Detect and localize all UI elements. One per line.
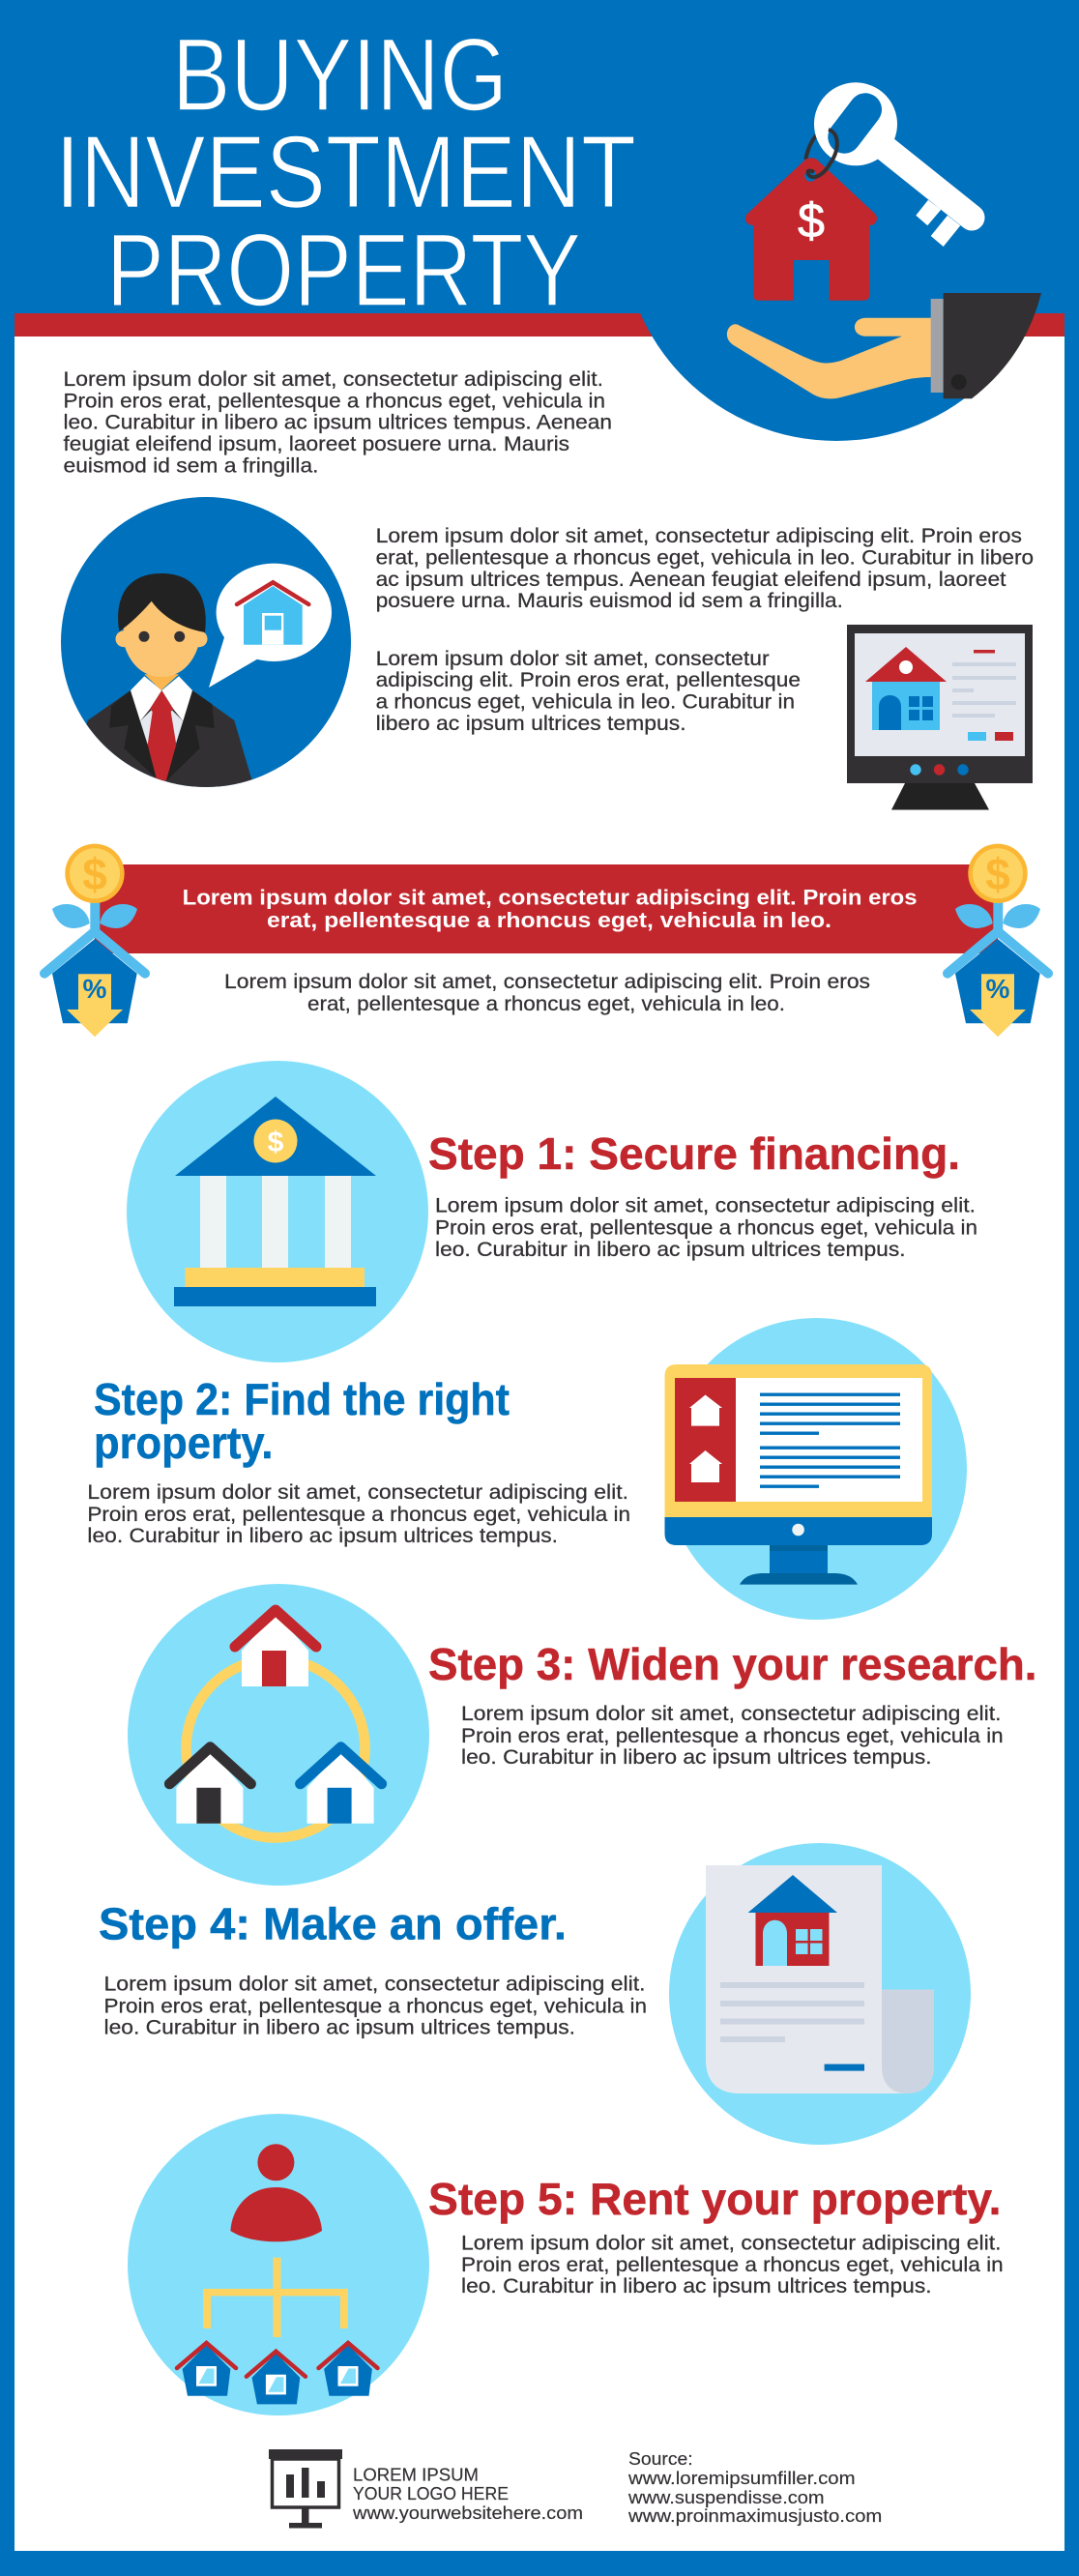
icon: logo presentation board — [269, 2449, 342, 2528]
icon: right money plant house — [948, 844, 1048, 1037]
text block: sources: Source: — [628, 2449, 693, 2469]
icon: step 1 bank: $ — [268, 1127, 284, 1158]
text block: step 3: Lorem ipsum dolor sit amet, consectetur adipiscing elit. — [461, 1703, 1002, 1725]
title: BUYING — [172, 16, 508, 132]
icon: step 5 landlord and tenants — [128, 2114, 429, 2415]
text block: step 1 — [435, 1195, 977, 1261]
text block: step 5: Lorem ipsum dolor sit amet, consectetur adipiscing elit. — [461, 2233, 1002, 2255]
text block: logo — [352, 2466, 583, 2523]
text block: left of monitor: Lorem ipsum dolor sit amet, consectetur — [376, 648, 770, 670]
text block: intro: leo. Curabitur in libero ac ipsum ultrices tempus. Aenean — [64, 412, 612, 434]
icon: hand receiving key and house tag: $ — [798, 193, 825, 248]
text block: right of businessman — [376, 525, 1034, 612]
text block: step 5 — [461, 2233, 1004, 2298]
text block: step 3: Proin eros erat, pellentesque a rhoncus eget, vehicula in — [461, 1725, 1004, 1747]
icon: step 2 computer listing — [665, 1318, 967, 1620]
title — [55, 16, 636, 328]
banner: red callout: Lorem ipsum dolor sit amet, consectetur adipiscing elit. Proin eros — [183, 886, 918, 909]
text block: under banner: Lorem ipsum dolor sit amet, consectetur adipiscing elit. Proin eros — [224, 971, 870, 993]
banner: red callout: erat, pellentesque a rhoncus eget, vehicula in leo. — [267, 908, 831, 932]
text block: right of businessman: Lorem ipsum dolor sit amet, consectetur adipiscing elit. Proin eros — [376, 525, 1022, 547]
text block: step 4 — [104, 1973, 647, 2038]
icon: monitor with house listing — [847, 625, 1033, 810]
text block: step 4: Proin eros erat, pellentesque a rhoncus eget, vehicula in — [104, 1996, 647, 2018]
text block: step 1: leo. Curabitur in libero ac ipsum ultrices tempus. — [435, 1239, 906, 1261]
text block: step 5: leo. Curabitur in libero ac ipsum ultrices tempus. — [461, 2275, 932, 2298]
text block: intro: Proin eros erat, pellentesque a rhoncus eget, vehicula in — [64, 391, 605, 413]
icon: hand receiving key and house tag — [622, 12, 1051, 441]
text block: right of businessman: erat, pellentesque a rhoncus eget, vehicula in leo. Curabitur in libero — [376, 546, 1034, 569]
icon: businessman with speech bubble — [61, 497, 351, 793]
text block: under banner: erat, pellentesque a rhoncus eget, vehicula in leo. — [307, 993, 785, 1015]
icon: left money plant house — [44, 844, 145, 1037]
icon: step 3 houses on a ring — [128, 1584, 429, 1886]
text block: left of monitor: a rhoncus eget, vehicula in leo. Curabitur in — [376, 691, 795, 714]
text block: sources: www.suspendisse.com — [627, 2488, 825, 2507]
text block: step 2: Proin eros erat, pellentesque a rhoncus eget, vehicula in — [87, 1504, 630, 1526]
icon: step 4 offer document — [669, 1843, 971, 2145]
heading: step 5: Step 5: Rent your property. — [428, 2174, 1002, 2224]
text block: step 1: Lorem ipsum dolor sit amet, consectetur adipiscing elit. — [435, 1195, 976, 1216]
heading: step 2: property. — [94, 1418, 273, 1468]
text block: left of monitor: adipiscing elit. Proin eros erat, pellentesque — [376, 669, 801, 691]
icon: step 1 bank — [127, 1061, 428, 1362]
title: PROPERTY — [106, 212, 581, 328]
icon: right money plant house: % — [986, 974, 1010, 1004]
text block: right of businessman: ac ipsum ultrices tempus. Aenean feugiat eleifend ipsum, laoreet — [376, 569, 1006, 591]
text block: intro: feugiat eleifend ipsum, laoreet posuere urna. Mauris — [64, 433, 569, 455]
heading: step 2 — [94, 1374, 510, 1468]
text block: intro: euismod id sem a fringilla. — [64, 455, 319, 478]
heading: step 3: Step 3: Widen your research. — [428, 1639, 1036, 1689]
text block: step 2: Lorem ipsum dolor sit amet, consectetur adipiscing elit. — [87, 1481, 628, 1504]
icon: right money plant house: $ — [985, 849, 1010, 899]
text block: sources — [627, 2449, 882, 2526]
text block: under banner — [224, 971, 870, 1015]
text block: step 2: leo. Curabitur in libero ac ipsum ultrices tempus. — [87, 1525, 558, 1547]
text block: sources: www.proinmaximusjusto.com — [627, 2506, 882, 2526]
text block: intro: Lorem ipsum dolor sit amet, consectetur adipiscing elit. — [64, 368, 603, 391]
text block: step 3 — [461, 1703, 1004, 1769]
heading: step 1: Step 1: Secure financing. — [428, 1128, 960, 1179]
text block: logo: YOUR LOGO HERE — [353, 2484, 509, 2503]
text block: step 2 — [87, 1481, 630, 1547]
heading: step 4: Step 4: Make an offer. — [99, 1899, 567, 1949]
text block: right of businessman: posuere urna. Mauris euismod id sem a fringilla. — [376, 590, 843, 612]
text block: left of monitor — [376, 648, 801, 735]
text block: left of monitor: libero ac ipsum ultrices tempus. — [376, 713, 686, 735]
icon: left money plant house: $ — [82, 849, 107, 899]
text block: step 4: Lorem ipsum dolor sit amet, consectetur adipiscing elit. — [104, 1973, 646, 1996]
header red bar — [15, 313, 1064, 337]
text block: step 5: Proin eros erat, pellentesque a rhoncus eget, vehicula in — [461, 2254, 1004, 2276]
text block: intro — [64, 368, 612, 478]
icon: left money plant house: % — [83, 974, 107, 1004]
text block: logo: www.yourwebsitehere.com — [352, 2503, 583, 2523]
banner: red callout — [95, 864, 998, 953]
text block: step 1: Proin eros erat, pellentesque a rhoncus eget, vehicula in — [435, 1216, 977, 1240]
text block: step 3: leo. Curabitur in libero ac ipsum ultrices tempus. — [461, 1746, 932, 1769]
text block: logo: LOREM IPSUM — [353, 2466, 479, 2485]
title: INVESTMENT — [55, 114, 636, 230]
heading: step 2: Step 2: Find the right — [94, 1374, 510, 1424]
text block: sources: www.loremipsumfiller.com — [627, 2469, 856, 2488]
text block: step 4: leo. Curabitur in libero ac ipsum ultrices tempus. — [104, 2017, 575, 2038]
